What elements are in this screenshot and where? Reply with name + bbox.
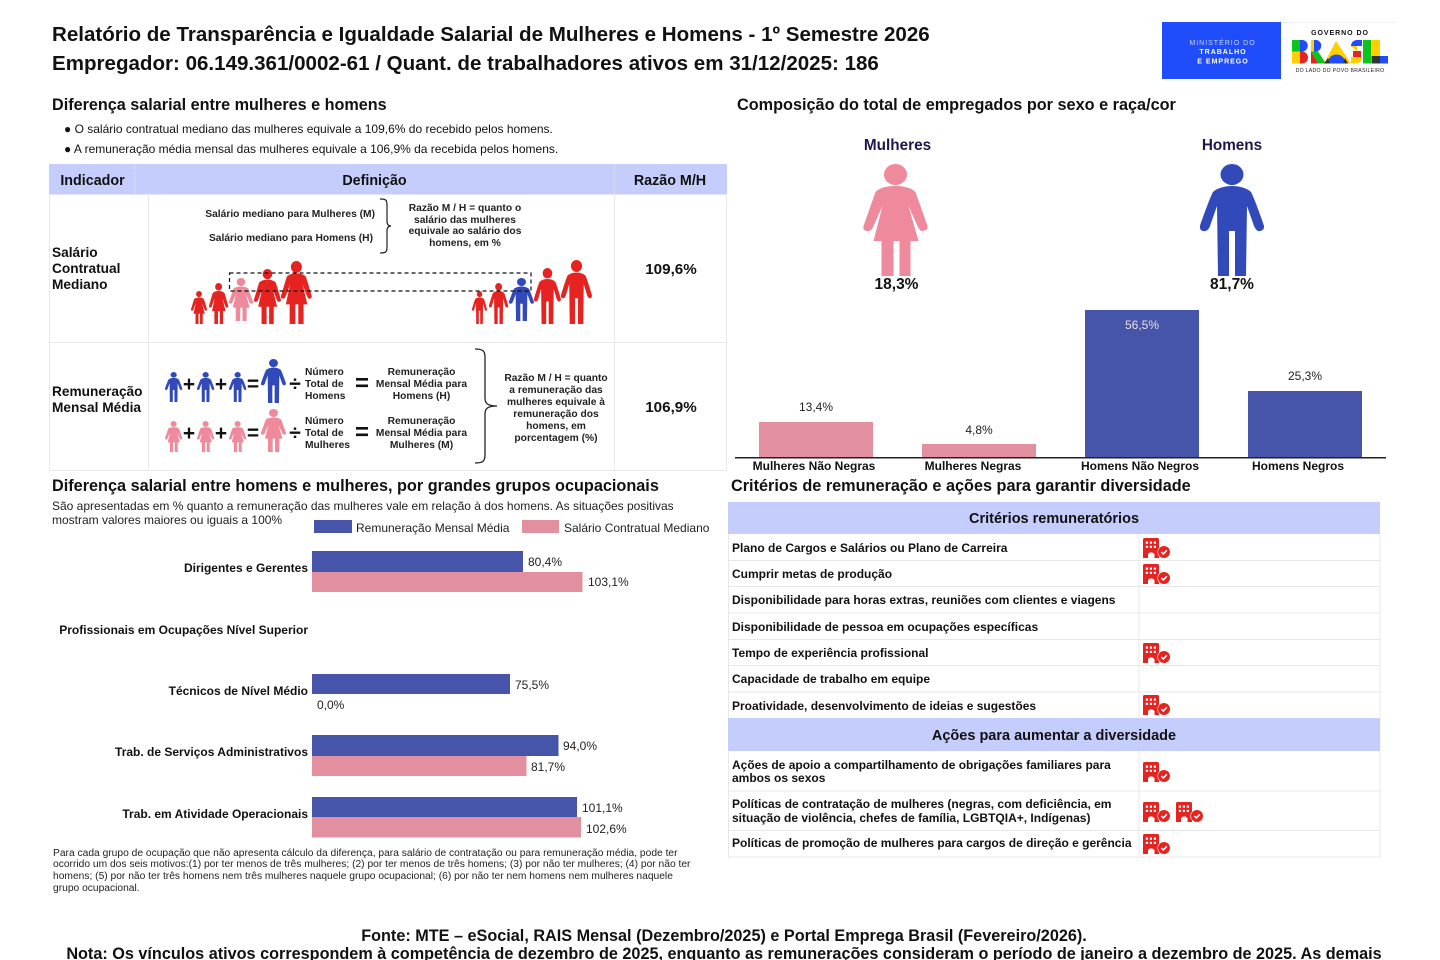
- row label: salário contratual mediano: Mediano: [52, 277, 108, 292]
- diagram: salário mediano: Razão M / H = quanto o: [409, 203, 521, 214]
- diagram: remuneração média: Mulheres (M): [390, 440, 453, 451]
- group: Trab. de Serviços Administrativos: Trab. de Serviços Administrativos: [115, 745, 308, 759]
- diagram: salário mediano: [191, 199, 592, 324]
- row label: remuneração mensal média: Mensal Média: [52, 400, 141, 415]
- diagram: remuneração média: Número: [305, 367, 344, 378]
- icons: critérios: [1143, 538, 1170, 715]
- text block: nota de rodapé: grupo ocupacional.: [53, 883, 140, 894]
- diagram: salário mediano: equivale ao salário dos: [409, 226, 522, 237]
- title: Empregador: 06.149.361/0002-61 / Quant. de trabalhadores ativos em 31/12/2025: 186: [52, 52, 879, 75]
- bar: Mulheres Negras: 4,8%: [965, 423, 993, 437]
- group: Trab. em Atividade Operacionais: 102,6%: [586, 822, 627, 836]
- table header: Razão M/H: [634, 173, 706, 189]
- fonte e nota: Fonte: MTE – eSocial, RAIS Mensal (Dezembro/2025) e Portal Emprega Brasil (Fevereiro/2026).: [361, 927, 1087, 945]
- group: Dirigentes e Gerentes: Dirigentes e Gerentes: [184, 561, 308, 575]
- bar chart: grupos ocupacionais: [59, 551, 629, 838]
- logo: Ministério do Trabalho e Emprego: MINISTÉRIO DO: [1189, 38, 1256, 47]
- legend: [314, 520, 710, 535]
- row label: remuneração mensal média: [52, 384, 143, 415]
- bar: Homens Não Negros: Homens Não Negros: [1081, 459, 1199, 473]
- diagram: remuneração média: homens, em: [526, 421, 586, 432]
- diagram: remuneração média: ÷: [289, 373, 301, 396]
- icon: mulheres 18,3%: 18,3%: [875, 276, 919, 293]
- diagram: remuneração média: porcentagem (%): [514, 433, 598, 444]
- I: [1363, 40, 1371, 64]
- diagram: remuneração média: Mensal Média para: [376, 379, 467, 390]
- group: Técnicos de Nível Médio: Técnicos de Nível Médio: [169, 684, 308, 698]
- list: critérios: Proatividade, desenvolvimento de ideias e sugestões: [732, 699, 1036, 713]
- diagram: remuneração média: Total de: [305, 428, 344, 439]
- R: [1311, 40, 1321, 52]
- diagram: salário mediano: salário das mulheres: [414, 215, 516, 226]
- text block: nota de rodapé: [53, 848, 691, 894]
- logo: Ministério do Trabalho e Emprego: E EMPREGO: [1197, 58, 1249, 66]
- header: ações: Ações para aumentar a diversidade: [932, 728, 1176, 744]
- diagram: remuneração média: [165, 349, 608, 463]
- heading: critérios: Critérios de remuneração e ações para garantir diversidade: [731, 477, 1191, 495]
- table header: Definição: [342, 173, 407, 189]
- group: Trab. de Serviços Administrativos: 94,0%: [563, 739, 597, 753]
- group: Trab. de Serviços Administrativos: [115, 735, 597, 776]
- text block: explicação: mostram valores maiores ou iguais a 100%: [52, 513, 282, 527]
- panel: critérios e ações: [728, 502, 1380, 858]
- list: ações: Ações de apoio a compartilhamento de obrigações familiares para: [732, 758, 1111, 772]
- panel: tabela de indicadores: [49, 164, 727, 471]
- list: ações: ambos os sexos: [732, 771, 826, 785]
- bar: Mulheres Não Negras: [753, 400, 876, 473]
- A: [1324, 41, 1351, 64]
- diagram: remuneração média: +: [215, 373, 227, 396]
- bar: Mulheres Não Negras: 13,4%: [799, 400, 833, 414]
- bar chart: composição por sexo e raça/cor: [735, 310, 1386, 473]
- list: critérios: [732, 541, 1116, 713]
- row value: 109,6%: 109,6%: [645, 261, 697, 278]
- icon: homens 81,7%: [1200, 137, 1264, 293]
- bar: Homens Não Negros: [1081, 310, 1199, 473]
- heading: grandes grupos ocupacionais: Diferença salarial entre homens e mulheres, por grandes grupos ocupacionais: [52, 477, 659, 495]
- bar: Homens Negros: 25,3%: [1288, 369, 1322, 383]
- text block: nota de rodapé: ocorrido um dos seis motivos:(1) por ter menos de três mulheres; (2) por ter menos de três homens; (3) por não ter mulheres; (4) por não ter: [53, 859, 691, 870]
- diagram: remuneração média: +: [215, 422, 227, 445]
- diagram: remuneração média: mulheres equivale à: [507, 397, 605, 408]
- list: critérios: Disponibilidade para horas extras, reuniões com clientes e viagens: [732, 593, 1116, 607]
- list: ações: Políticas de promoção de mulheres para cargos de direção e gerência: [732, 836, 1132, 850]
- fonte e nota: [66, 927, 1382, 960]
- text block: nota de rodapé: Para cada grupo de ocupação que não apresenta cálculo da diferença, para salário de contratação ou para remuneração média, pode ter: [53, 848, 678, 859]
- diagram: remuneração média: ÷: [289, 422, 301, 445]
- text block: bullets: ● A remuneração média mensal das mulheres equivale a 106,9% da recebida pelos homens.: [64, 142, 558, 156]
- L: [1372, 40, 1380, 56]
- list: ações: situação de violência, chefes de família, LGBTQIA+, Indígenas): [732, 811, 1090, 825]
- diagram: remuneração média: +: [183, 422, 195, 445]
- group: Trab. em Atividade Operacionais: Trab. em Atividade Operacionais: [122, 807, 308, 821]
- diagram: remuneração média: =: [355, 370, 369, 397]
- row label: salário contratual mediano: Salário: [52, 245, 98, 260]
- list: critérios: Disponibilidade de pessoa em ocupações específicas: [732, 620, 1038, 634]
- diagram: remuneração média: Número: [305, 416, 344, 427]
- diagram: remuneração média: =: [247, 373, 259, 396]
- logo: Ministério do Trabalho e Emprego: TRABALHO: [1199, 49, 1247, 56]
- bar: Homens Negros: [1248, 369, 1362, 473]
- list: ações: [732, 758, 1132, 850]
- group: Dirigentes e Gerentes: 80,4%: [528, 555, 562, 569]
- list: critérios: Plano de Cargos e Salários ou Plano de Carreira: [732, 541, 1008, 555]
- diagram: remuneração média: Razão M / H = quanto: [504, 373, 608, 384]
- group: Técnicos de Nível Médio: [169, 674, 549, 712]
- icon: mulheres 18,3%: [863, 137, 931, 293]
- list: critérios: Capacidade de trabalho em equipe: [732, 672, 930, 686]
- diagram: remuneração média: Homens (H): [393, 391, 450, 402]
- diagram: salário mediano: homens, em %: [429, 238, 501, 249]
- list: critérios: Tempo de experiência profissional: [732, 646, 928, 660]
- legend: Remuneração Mensal Média: [356, 521, 510, 535]
- table header: [49, 164, 727, 194]
- logo: Governo do Brasil: [1281, 22, 1397, 74]
- bar: Mulheres Negras: Mulheres Negras: [925, 459, 1022, 473]
- header: ações: [728, 718, 1380, 751]
- group: Técnicos de Nível Médio: 0,0%: [317, 698, 345, 712]
- diagram: remuneração média: =: [355, 419, 369, 446]
- group: Trab. em Atividade Operacionais: [122, 797, 627, 838]
- diagram: remuneração média: Remuneração: [388, 416, 455, 427]
- title: [52, 23, 930, 75]
- text block: bullets: ● O salário contratual mediano das mulheres equivale a 109,6% do recebido pelos homens.: [64, 122, 553, 136]
- list: ações: Políticas de contratação de mulheres (negras, com deficiência, em: [732, 797, 1111, 811]
- diagram: remuneração média: =: [247, 422, 259, 445]
- text block: explicação: São apresentadas em % quanto a remuneração das mulheres vale em relação à dos homens. As situações positivas: [52, 499, 674, 513]
- bar: Mulheres Não Negras: Mulheres Não Negras: [753, 459, 876, 473]
- group: Dirigentes e Gerentes: [184, 551, 629, 592]
- icon: homens 81,7%: 81,7%: [1210, 276, 1254, 293]
- diagram: salário mediano: Salário mediano para Homens (H): [209, 233, 373, 244]
- group: Dirigentes e Gerentes: 103,1%: [588, 575, 629, 589]
- heading: composição: Composição do total de empregados por sexo e raça/cor: [737, 96, 1177, 114]
- text block: nota de rodapé: homens; (5) por não ter três homens nem três mulheres naquele grupo ocupacional; (6) por não ter nem homens nem mulheres naquele: [53, 871, 673, 882]
- bar: Homens Negros: Homens Negros: [1252, 459, 1344, 473]
- text block: explicação: [52, 499, 674, 527]
- group: Trab. em Atividade Operacionais: 101,1%: [582, 801, 623, 815]
- table header: Indicador: [60, 173, 125, 189]
- diagram: remuneração média: Mensal Média para: [376, 428, 467, 439]
- group: Técnicos de Nível Médio: 75,5%: [515, 678, 549, 692]
- logo: Governo do Brasil: DO LADO DO POVO BRASILEIRO: [1296, 68, 1384, 74]
- legend: Salário Contratual Mediano: [564, 521, 710, 535]
- icon: mulheres 18,3%: Mulheres: [864, 137, 931, 154]
- diagram: salário mediano: Salário mediano para Mulheres (M): [205, 209, 375, 220]
- S: [1351, 40, 1362, 46]
- title: Relatório de Transparência e Igualdade Salarial de Mulheres e Homens - 1º Semestre 2026: [52, 23, 930, 46]
- row value: 106,9%: 106,9%: [645, 399, 697, 416]
- header: critérios remuneratórios: [728, 502, 1380, 534]
- logo: Ministério do Trabalho e Emprego: [1162, 22, 1281, 79]
- heading: diferença salarial: Diferença salarial entre mulheres e homens: [52, 96, 387, 114]
- diagram: remuneração média: Total de: [305, 379, 344, 390]
- list: critérios: Cumprir metas de produção: [732, 567, 892, 581]
- row label: salário contratual mediano: Contratual: [52, 261, 120, 276]
- group: Trab. de Serviços Administrativos: 81,7%: [531, 760, 565, 774]
- icon: homens 81,7%: Homens: [1202, 137, 1262, 154]
- diagram: remuneração média: a remuneração das: [509, 385, 603, 396]
- diagram: remuneração média: Mulheres: [305, 440, 350, 451]
- header: critérios remuneratórios: Critérios remuneratórios: [969, 511, 1139, 527]
- text block: bullets: [64, 122, 558, 156]
- diagram: remuneração média: remuneração dos: [513, 409, 599, 420]
- logo: Governo do Brasil: GOVERNO DO: [1311, 30, 1369, 37]
- bar: Mulheres Negras: [922, 423, 1036, 473]
- diagram: remuneração média: +: [183, 373, 195, 396]
- row label: salário contratual mediano: [52, 245, 120, 292]
- icons: ações: [1143, 762, 1203, 854]
- row label: remuneração mensal média: Remuneração: [52, 384, 143, 399]
- bar: Homens Não Negros: 56,5%: [1125, 318, 1159, 332]
- B: [1292, 40, 1300, 52]
- group: Profissionais em Ocupações Nível Superior: Profissionais em Ocupações Nível Superior: [59, 623, 308, 637]
- diagram: remuneração média: Homens: [305, 391, 346, 402]
- diagram: remuneração média: Remuneração: [388, 367, 455, 378]
